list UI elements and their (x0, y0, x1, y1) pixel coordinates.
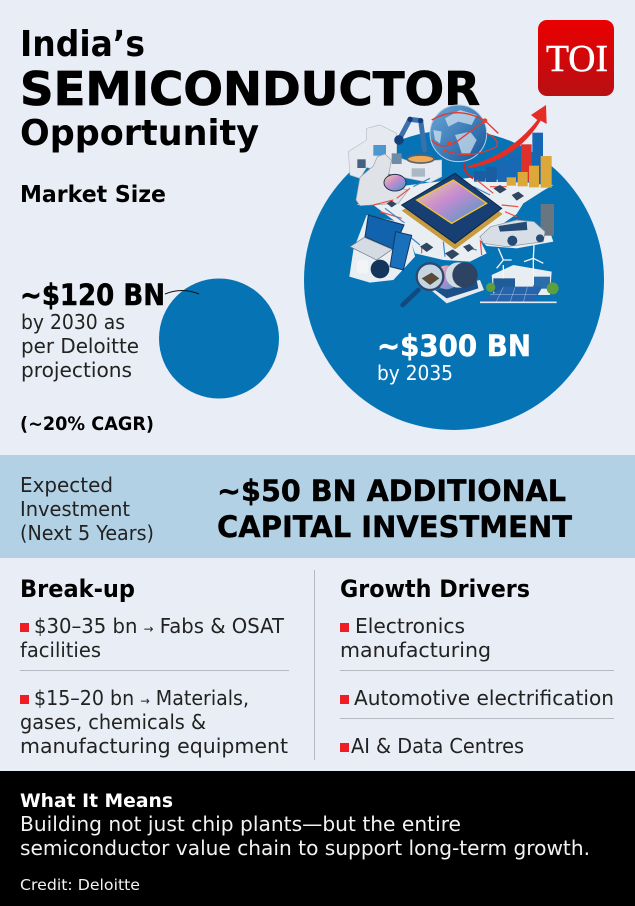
illustration: semiconductor ecosystem (348, 105, 559, 305)
text: summary (20, 812, 590, 860)
list item: materials (20, 686, 288, 758)
list item: materials: $15–20 bn → Materials, (34, 686, 249, 710)
icon: magnifier and wafer tool (403, 262, 484, 305)
title: India’s (20, 24, 145, 65)
text: investment label: (Next 5 Years) (20, 521, 154, 545)
chart: small bubble 2030 (159, 278, 279, 398)
list item: electronics: Electronics (355, 614, 465, 638)
logo: TOI: TOI (546, 38, 608, 80)
icon: small components (387, 185, 524, 259)
panel: expected investment (0, 455, 635, 558)
icon: rising red arrow (464, 105, 547, 178)
logo: TOI (538, 20, 614, 96)
list item: materials: manufacturing equipment (20, 734, 288, 758)
text: investment label: Expected (20, 473, 113, 497)
title: Opportunity (20, 113, 259, 154)
text: CAGR: (~20% CAGR) (20, 413, 154, 435)
callout: 120 billion by 2030: projections (21, 358, 132, 382)
panel: break-up (20, 575, 289, 758)
text: investment label (20, 473, 154, 545)
text: summary: Building not just chip plants—but the entire (20, 812, 461, 836)
text: investment label: Investment (20, 497, 130, 521)
text: summary: semiconductor value chain to support long-term growth. (20, 836, 590, 860)
text: credit: Credit: Deloitte (20, 876, 140, 894)
callout: 120 billion by 2030: ~$120 BN (20, 278, 165, 312)
text: investment headline: CAPITAL INVESTMENT (217, 510, 572, 544)
list item: fabs and OSAT: facilities (20, 638, 101, 662)
callout: 300 billion by 2035: ~$300 BN (377, 329, 531, 363)
text: investment headline (217, 474, 572, 544)
panel: what it means (0, 771, 635, 906)
list item: AI and data centres: AI & Data Centres (351, 734, 524, 758)
callout: 120 billion by 2030: per Deloitte (21, 334, 139, 358)
list item: automotive: Automotive electrification (354, 686, 614, 710)
icon: clean-room factory (348, 125, 442, 183)
callout: 300 billion by 2035: by 2035 (377, 361, 453, 385)
chart: large bubble 2035 (304, 130, 604, 430)
text: investment headline: ~$50 BN ADDITIONAL (217, 474, 566, 508)
heading: growth drivers: Growth Drivers (340, 575, 530, 603)
callout: 120 billion by 2030 (20, 278, 199, 382)
icon: laptop, phone and wearables (349, 215, 415, 283)
icon: central microchip (402, 173, 503, 249)
heading: market size: Market Size (20, 182, 166, 208)
illustration backdrop (357, 177, 553, 262)
icon: robot arm (397, 118, 425, 150)
heading: what it means: What It Means (20, 790, 173, 812)
icon: solar panels, wind turbines and building (480, 245, 559, 302)
list item: fabs and OSAT: $30–35 bn → Fabs & OSAT (34, 614, 285, 638)
icon: electric car and tower (478, 204, 554, 248)
title (20, 24, 480, 154)
bar chart: growth bars and coins (474, 133, 552, 188)
callout: 300 billion by 2035 (377, 329, 531, 385)
list item: electronics: manufacturing (340, 638, 491, 662)
icon: globe (430, 105, 498, 162)
heading: break-up: Break-up (20, 575, 135, 603)
panel: growth drivers (340, 575, 614, 758)
list item: fabs and OSAT (20, 614, 285, 662)
callout: 120 billion by 2030: by 2030 as (21, 310, 125, 334)
title: SEMICONDUCTOR (20, 62, 480, 116)
icon: circuit traces (373, 178, 518, 257)
icon: technician with wafer (356, 154, 408, 206)
list item: materials: gases, chemicals & (20, 710, 206, 734)
list item: electronics (340, 614, 491, 662)
